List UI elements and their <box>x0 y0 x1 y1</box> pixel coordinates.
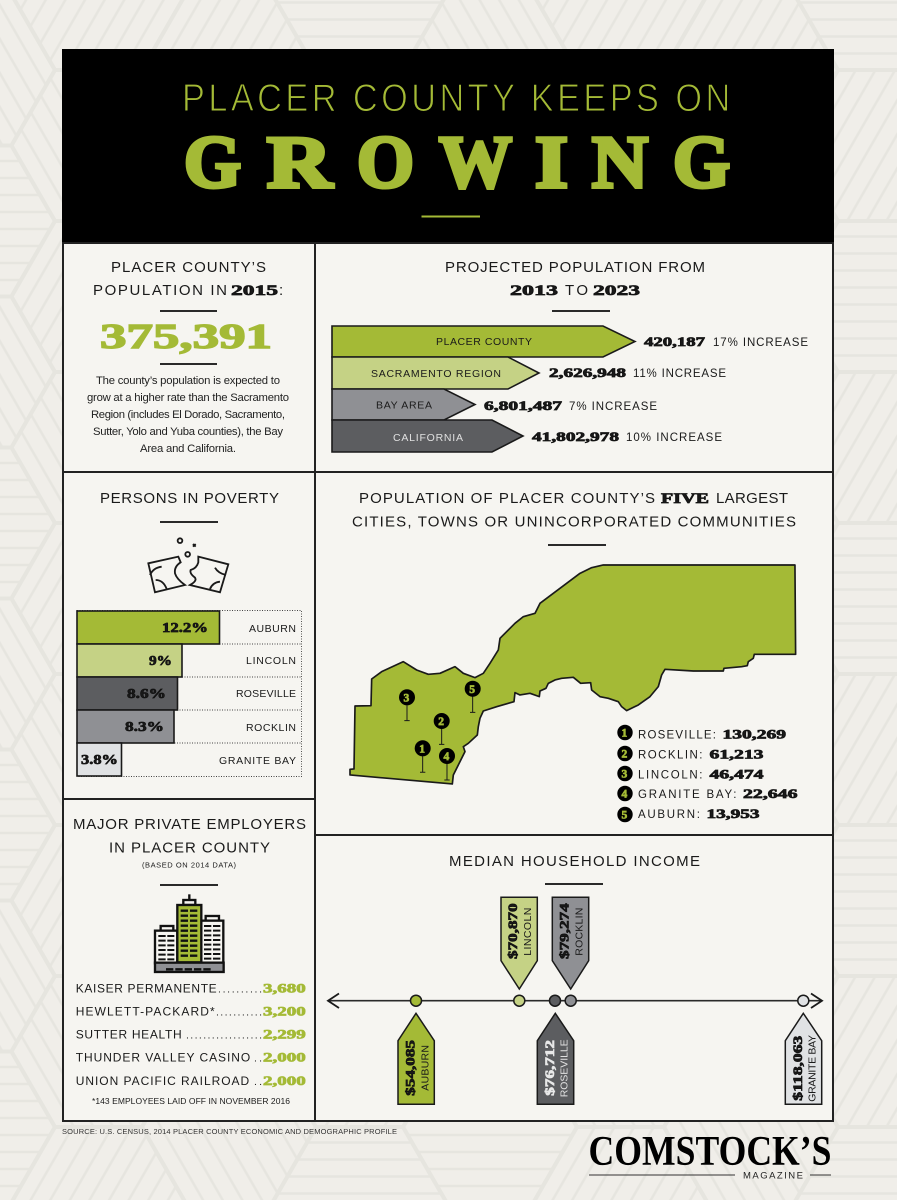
legend row: Granite Bay: GRANITE BAY: <box>638 789 736 801</box>
heading: projected population from 2013 to 2023: PROJECTED POPULATION FROM <box>445 259 705 276</box>
map: Placer County outline <box>350 565 796 784</box>
panel: title banner <box>62 49 834 243</box>
map pin 1: 1 <box>419 744 425 756</box>
map pin 2: 2 <box>438 716 444 728</box>
legend row: Lincoln <box>617 766 765 782</box>
tag: Roseville: $76,712 <box>543 1040 557 1096</box>
tag: Lincoln: $70,870 <box>506 903 520 959</box>
tag: Auburn <box>398 1013 434 1104</box>
heading: persons in poverty: PERSONS IN POVERTY <box>100 490 279 507</box>
arrow: California: 41,802,978 <box>532 430 619 444</box>
map pin 2 <box>434 713 450 729</box>
infographic frame <box>63 50 833 1121</box>
heading: projected population from 2013 to 2023: 2023 <box>593 283 640 299</box>
heading: projected population from 2013 to 2023: TO <box>565 282 588 299</box>
employer row: Hewlett-Packard <box>76 1005 306 1019</box>
logo: Comstock's Magazine: COMSTOCK’S <box>588 1129 832 1175</box>
legend row: Rocklin: ROCKLIN: <box>638 750 702 762</box>
heading: projected population from 2013 to 2023 <box>445 259 705 299</box>
footnote: *143 EMPLOYEES LAID OFF IN NOVEMBER 2016 <box>92 1096 290 1106</box>
icon: office buildings <box>155 894 224 972</box>
arrow: Bay Area <box>332 389 657 420</box>
legend row: Granite Bay <box>617 786 798 801</box>
source line: SOURCE: U.S. CENSUS, 2014 PLACER COUNTY ECONOMIC AND DEMOGRAPHIC PROFILE <box>62 1127 397 1136</box>
heading: population of five largest communities: POPULATION OF PLACER COUNTY’S <box>359 490 655 507</box>
legend row: Auburn: 5 <box>622 810 628 822</box>
employer row: Thunder Valley Casino: THUNDER VALLEY CASINO <box>76 1051 250 1065</box>
tag: Auburn: $54,085 <box>404 1040 418 1096</box>
bar: Auburn: 12.2% <box>162 621 208 636</box>
tag: Auburn: AUBURN <box>419 1045 431 1091</box>
title word: Growing: N <box>592 122 648 204</box>
title word: Growing: O <box>357 122 414 204</box>
employer row: Kaiser Permanente: 3,680 <box>263 982 306 996</box>
title word: Growing: W <box>439 122 512 204</box>
heading: Placer County's population in 2015: : <box>279 282 283 299</box>
map pin 3 <box>399 689 415 705</box>
legend row: Roseville: 130,269 <box>722 728 786 742</box>
heading: Placer County's population in 2015: PLACER COUNTY’S <box>111 259 266 276</box>
arrow: Sacramento Region: SACRAMENTO REGION <box>371 368 501 380</box>
tag: Granite Bay <box>785 1013 822 1104</box>
bar: Lincoln: 9% <box>149 654 172 669</box>
bar: Auburn <box>77 611 296 644</box>
heading: population of five largest communities <box>352 490 796 530</box>
arrow: Placer County: PLACER COUNTY <box>436 336 532 348</box>
bar: Rocklin: 8.3% <box>125 720 164 735</box>
arrow: Sacramento Region <box>332 357 726 389</box>
panel: five largest communities map <box>316 472 833 835</box>
map pin 5: 5 <box>469 684 475 696</box>
description text <box>87 375 289 455</box>
heading: median household income: MEDIAN HOUSEHOLD INCOME <box>449 853 700 870</box>
bar: Lincoln: LINCOLN <box>246 655 296 667</box>
employer row: Thunder Valley Casino: .. <box>254 1053 262 1065</box>
icon: torn money <box>148 538 228 592</box>
bar: Auburn: AUBURN <box>249 623 296 635</box>
employer row: Hewlett-Packard: ........... <box>216 1007 262 1019</box>
bar chart: poverty by city <box>77 610 302 776</box>
legend row: Roseville: ROSEVILLE: <box>638 730 716 742</box>
tag: Rocklin <box>552 897 589 989</box>
arrow: Bay Area: BAY AREA <box>376 400 432 412</box>
employer row: Union Pacific Railroad: UNION PACIFIC RAILROAD <box>76 1074 250 1088</box>
employer row: Sutter Health: SUTTER HEALTH <box>76 1028 182 1042</box>
employer row: Kaiser Permanente: .......... <box>218 984 262 996</box>
heading: population of five largest communities: LARGEST <box>716 490 788 507</box>
timeline axis <box>328 994 822 1008</box>
legend row: Rocklin <box>617 746 764 762</box>
heading: major private employers: IN PLACER COUNTY <box>109 840 270 856</box>
heading: Placer County's population in 2015 <box>93 259 283 299</box>
employer row: Hewlett-Packard: HEWLETT-PACKARD* <box>76 1005 215 1019</box>
employer row: Kaiser Permanente: KAISER PERMANENTE <box>76 982 217 996</box>
bar: Roseville: 8.6% <box>127 687 166 702</box>
tag: Rocklin: ROCKLIN <box>573 908 585 956</box>
legend row: Lincoln: 3 <box>622 769 628 781</box>
arrow: Sacramento Region: 11% INCREASE <box>633 368 726 380</box>
legend row: Rocklin: 61,213 <box>710 748 764 762</box>
bar: Lincoln <box>77 644 296 677</box>
map pin 4 <box>439 748 455 764</box>
title word: Growing: G <box>184 122 241 204</box>
arrow: Bay Area: 6,801,487 <box>484 399 562 413</box>
arrow: California: 10% INCREASE <box>626 432 722 444</box>
description text: Sutter, Yolo and Yuba counties), the Bay <box>93 426 283 438</box>
employer row: Thunder Valley Casino: 2,000 <box>263 1051 306 1065</box>
title divider <box>422 216 480 218</box>
tag: Granite Bay: $118,063 <box>791 1036 805 1101</box>
bar: Granite Bay: GRANITE BAY <box>219 755 296 767</box>
employer row: Hewlett-Packard: 3,200 <box>263 1005 306 1019</box>
bar: Granite Bay: 3.8% <box>81 753 118 768</box>
heading: population of five largest communities: FIVE <box>661 491 709 507</box>
title line: Placer County Keeps On: PLACER COUNTY KEEPS ON <box>182 76 730 119</box>
heading: Placer County's population in 2015: 2015 <box>231 283 278 299</box>
description text: grow at a higher rate than the Sacramento <box>87 392 289 404</box>
legend: city populations <box>617 725 798 822</box>
heading: Placer County's population in 2015: POPULATION IN <box>93 282 227 299</box>
arrow: Bay Area: 7% INCREASE <box>569 401 657 413</box>
legend row: Auburn: AUBURN: <box>638 809 700 821</box>
bar: Granite Bay <box>77 743 296 776</box>
panel: persons in poverty <box>63 472 315 799</box>
big number: 375,391: 375,391 <box>100 317 272 356</box>
panel: projected population <box>316 243 833 472</box>
tag: Rocklin: $79,274 <box>558 902 572 959</box>
tag: Granite Bay: GRANITE BAY <box>807 1035 819 1102</box>
heading: population of five largest communities: CITIES, TOWNS OR UNINCORPORATED COMMUNITIES <box>352 514 796 530</box>
title word: Growing <box>184 122 730 204</box>
arrow: California <box>332 420 722 452</box>
legend row: Granite Bay: 4 <box>622 789 628 801</box>
employer row: Kaiser Permanente <box>76 982 306 996</box>
employer row: Union Pacific Railroad: .. <box>254 1076 262 1088</box>
tag: Roseville: ROSEVILLE <box>558 1039 570 1097</box>
arrow: Placer County: 17% INCREASE <box>713 337 808 349</box>
heading: major private employers: (BASED ON 2014 DATA) <box>142 860 236 870</box>
bar: Roseville: ROSEVILLE <box>236 688 296 700</box>
panel: median household income <box>316 835 833 1121</box>
heading: major private employers <box>73 816 306 870</box>
bar: Roseville <box>77 677 296 710</box>
logo: Comstock's Magazine: MAGAZINE <box>743 1170 803 1182</box>
bar: Rocklin: ROCKLIN <box>246 722 296 734</box>
title word: Growing: I <box>535 122 568 204</box>
tag: Roseville <box>537 1013 574 1104</box>
panel: population in 2015 <box>63 243 315 472</box>
employer row: Sutter Health <box>76 1028 306 1042</box>
arrow: Placer County: 420,187 <box>644 335 705 349</box>
tag: Lincoln: LINCOLN <box>522 908 534 956</box>
heading: projected population from 2013 to 2023: 2013 <box>510 283 558 299</box>
employer row: Sutter Health: 2,299 <box>263 1028 306 1042</box>
legend row: Granite Bay: 22,646 <box>743 787 798 801</box>
legend row: Lincoln: LINCOLN: <box>638 770 702 782</box>
legend row: Auburn <box>617 807 760 822</box>
heading: major private employers: MAJOR PRIVATE EMPLOYERS <box>73 816 306 833</box>
title word: Growing: G <box>673 122 730 204</box>
map pin 3: 3 <box>404 692 410 704</box>
legend row: Roseville <box>617 725 786 742</box>
description text: Area and California. <box>140 443 236 455</box>
panel: major private employers <box>63 799 315 1121</box>
legend row: Rocklin: 2 <box>622 749 628 761</box>
map pin 1 <box>415 740 431 756</box>
legend row: Lincoln: 46,474 <box>710 768 765 782</box>
employer row: Sutter Health: .................. <box>186 1030 262 1042</box>
arrow: California: CALIFORNIA <box>393 432 463 444</box>
legend row: Roseville: 1 <box>622 728 628 740</box>
tag: Lincoln <box>501 897 537 989</box>
map pin 5 <box>465 681 481 697</box>
title word: Growing: R <box>267 122 334 204</box>
legend row: Auburn: 13,953 <box>706 807 760 821</box>
employer row: Union Pacific Railroad: 2,000 <box>263 1074 306 1088</box>
map pin 4: 4 <box>444 751 450 763</box>
arrow: Placer County <box>332 326 808 357</box>
bar: Rocklin <box>77 710 296 743</box>
arrow: Sacramento Region: 2,626,948 <box>549 366 626 380</box>
description text: Region (includes El Dorado, Sacramento, <box>91 409 285 421</box>
description text: The county’s population is expected to <box>96 375 280 387</box>
